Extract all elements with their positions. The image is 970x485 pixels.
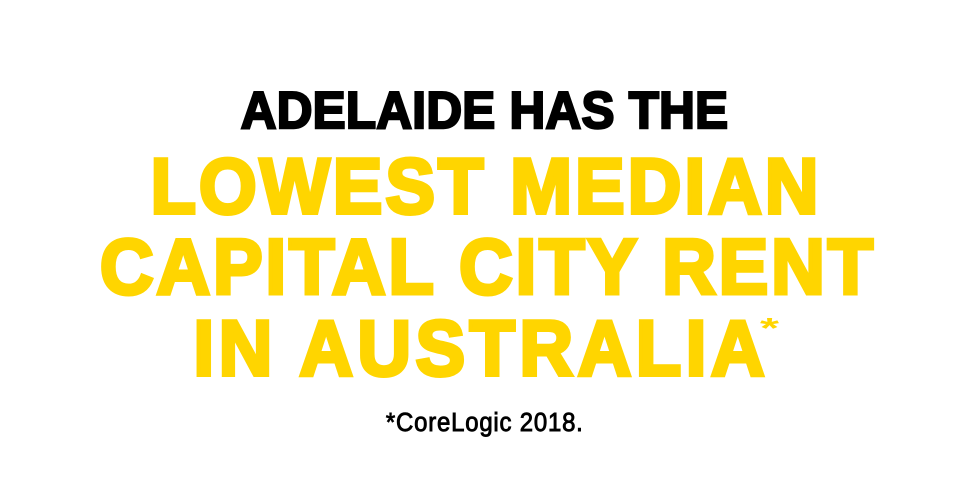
headline: yellow statement: LOWEST MEDIAN	[151, 143, 818, 230]
heading: black line: ADELAIDE HAS THE	[241, 81, 728, 139]
headline: yellow statement	[100, 143, 873, 392]
headline: yellow statement: IN AUSTRALIA	[194, 305, 764, 392]
headline: yellow statement: CAPITAL CITY RENT	[100, 224, 873, 311]
yellow asterisk: *	[760, 313, 780, 345]
footnote: *CoreLogic 2018.	[386, 408, 583, 437]
